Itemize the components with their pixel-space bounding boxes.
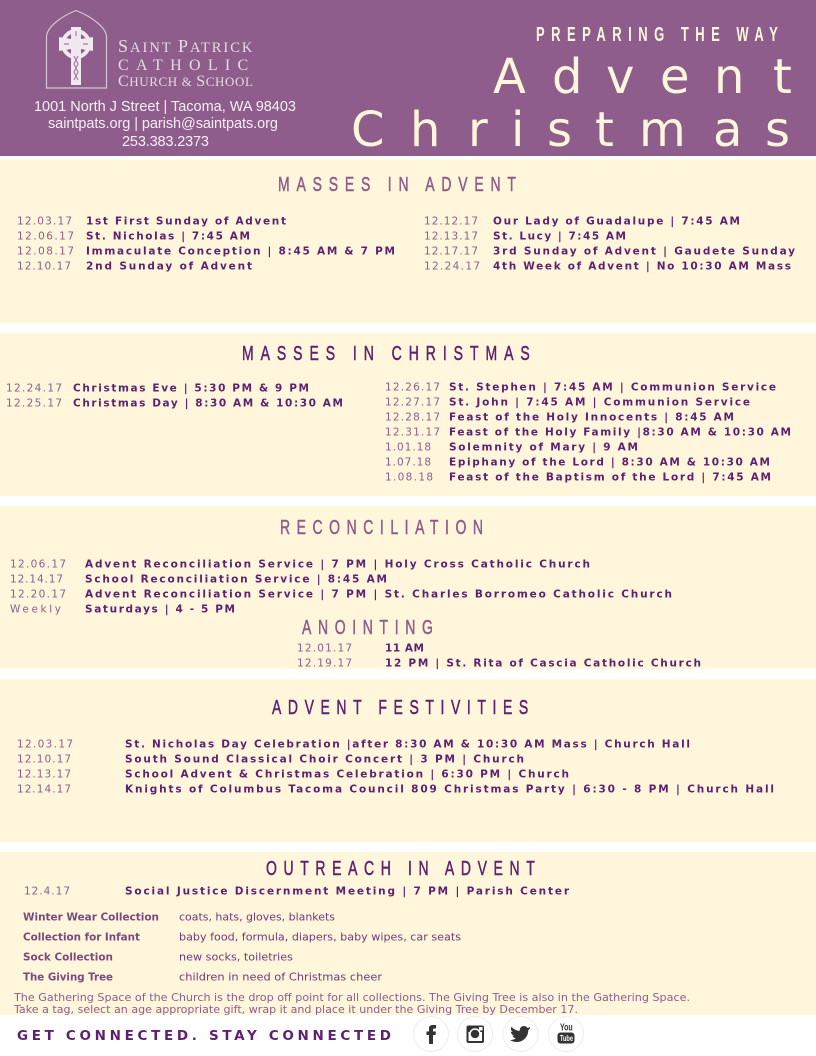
- anointing schedule: 12 PM | St. Rita of Cascia Catholic Church: [385, 657, 701, 669]
- schedule: right column: 12.28.17: [385, 411, 440, 423]
- festivities schedule: 12.14.17: [17, 783, 71, 795]
- icon: YouTube: [548, 1016, 584, 1052]
- panel: masses in Advent: [0, 160, 816, 323]
- title: Advent: Advent: [493, 49, 792, 105]
- schedule: right column: Feast of the Holy Family |8:30 AM & 10:30 AM: [449, 426, 791, 438]
- footer call to action: GET CONNECTED. STAY CONNECTED: [17, 1028, 391, 1044]
- schedule: right column: 12.24.17: [424, 260, 480, 272]
- logo wordmark: CHURCH & SCHOOL: [118, 73, 253, 90]
- schedule: left column: 1st First Sunday of Advent: [86, 215, 286, 227]
- schedule: right column: 1.01.18: [385, 441, 431, 453]
- schedule: right column: St. John | 7:45 AM | Communion Service: [449, 396, 750, 408]
- social icons: [414, 1016, 584, 1052]
- icon: Instagram: [458, 1016, 492, 1052]
- festivities schedule: Knights of Columbus Tacoma Council 809 Christmas Party | 6:30 - 8 PM | Church Hall: [125, 783, 774, 795]
- contact details: 1001 North J Street | Tacoma, WA 98403: [34, 99, 296, 115]
- collection list: baby food, formula, diapers, baby wipes, car seats: [179, 931, 461, 943]
- logo wordmark: SAINT PATRICK: [118, 36, 254, 56]
- heading: ADVENT FESTIVITIES: [272, 695, 528, 719]
- icon: Twitter: [503, 1016, 538, 1052]
- reconciliation schedule: [10, 558, 672, 615]
- schedule: right column: Epiphany of the Lord | 8:30 AM & 10:30 AM: [449, 456, 770, 468]
- collection list: Sock Collection: [23, 951, 113, 963]
- schedule: left column: Christmas Eve | 5:30 PM & 9 PM: [73, 382, 309, 394]
- schedule: left column: Christmas Day | 8:30 AM & 10:30 AM: [73, 397, 343, 409]
- schedule: left column: 2nd Sunday of Advent: [86, 260, 252, 272]
- schedule: right column: 12.26.17: [385, 381, 440, 393]
- heading: MASSES IN CHRISTMAS: [242, 341, 530, 365]
- festivities schedule: School Advent & Christmas Celebration | 6:30 PM | Church: [125, 768, 569, 780]
- schedule: right column: 1.08.18: [385, 471, 433, 483]
- schedule: right column: 12.13.17: [424, 230, 478, 242]
- schedule: left column: 12.03.17: [17, 215, 72, 227]
- anointing schedule: 12.19.17: [297, 657, 352, 669]
- heading: OUTREACH IN ADVENT: [266, 856, 535, 880]
- schedule: right column: 12.31.17: [385, 426, 440, 438]
- drop-off note: Take a tag, select an age appropriate gift, wrap it and place it under the Giving Tree by December 17.: [13, 1004, 578, 1016]
- schedule: left column: [17, 215, 395, 272]
- heading: MASSES IN ADVENT: [278, 172, 516, 196]
- icon: YouTube: Tube: [560, 1035, 573, 1043]
- schedule: left column: Immaculate Conception | 8:45 AM & 7 PM: [86, 245, 395, 257]
- collection list: new socks, toiletries: [179, 951, 293, 963]
- reconciliation schedule: School Reconciliation Service | 8:45 AM: [85, 573, 387, 585]
- schedule: right column: St. Stephen | 7:45 AM | Communion Service: [449, 381, 776, 393]
- reconciliation schedule: Saturdays | 4 - 5 PM: [85, 603, 235, 615]
- drop-off note: The Gathering Space of the Church is the drop off point for all collections. The Giving Tree is also in the Gathering Space.: [13, 992, 690, 1004]
- festivities schedule: 12.03.17: [17, 738, 73, 750]
- collection list: Collection for Infant: [23, 931, 140, 943]
- collection list: [23, 911, 461, 983]
- discernment meeting: 12.4.17: [24, 885, 70, 897]
- contact details: 253.383.2373: [122, 134, 209, 150]
- panel: reconciliation and anointing: [0, 506, 816, 669]
- festivities schedule: 12.10.17: [17, 753, 71, 765]
- logo: church arch and Celtic cross: [46, 10, 106, 88]
- logo wordmark: [118, 36, 256, 90]
- schedule: right column: 1.07.18: [385, 456, 431, 468]
- schedule: right column: [385, 381, 791, 483]
- reconciliation schedule: Advent Reconciliation Service | 7 PM | St. Charles Borromeo Catholic Church: [85, 588, 672, 600]
- schedule: right column: 12.17.17: [424, 245, 478, 257]
- anointing schedule: 12.01.17: [297, 642, 352, 654]
- logo wordmark: CATHOLIC: [118, 57, 256, 74]
- festivities schedule: 12.13.17: [17, 768, 71, 780]
- discernment meeting: Social Justice Discernment Meeting | 7 PM | Parish Center: [125, 885, 570, 897]
- schedule: right column: Feast of the Baptism of the Lord | 7:45 AM: [449, 471, 771, 483]
- heading: reconciliation: RECONCILIATION: [280, 515, 483, 539]
- schedule: right column: Feast of the Holy Innocents | 8:45 AM: [449, 411, 734, 423]
- schedule: right column: 3rd Sunday of Advent | Gaudete Sunday: [493, 245, 795, 257]
- anointing schedule: [297, 642, 701, 669]
- festivities schedule: [17, 738, 774, 795]
- icon: Facebook: [414, 1016, 448, 1052]
- contact details: [34, 99, 296, 150]
- drop-off note: [13, 992, 690, 1016]
- anointing schedule: 11 AM: [385, 642, 424, 654]
- schedule: right column: 12.12.17: [424, 215, 478, 227]
- panel: outreach in Advent: [0, 852, 816, 1016]
- schedule: left column: 12.24.17: [6, 382, 62, 394]
- panel: Advent festivities: [0, 679, 816, 842]
- schedule: left column: 12.08.17: [17, 245, 74, 257]
- header banner: [0, 0, 816, 158]
- collection list: The Giving Tree: [23, 971, 113, 983]
- collection list: children in need of Christmas cheer: [179, 971, 383, 983]
- schedule: left column: 12.25.17: [6, 397, 62, 409]
- schedule: right column: 4th Week of Advent | No 10:30 AM Mass: [493, 260, 791, 272]
- schedule: right column: [424, 215, 795, 272]
- title: Christmas: Christmas: [351, 102, 790, 158]
- festivities schedule: South Sound Classical Choir Concert | 3 PM | Church: [125, 753, 524, 765]
- schedule: right column: Solemnity of Mary | 9 AM: [449, 441, 638, 453]
- collection list: coats, hats, gloves, blankets: [179, 911, 335, 923]
- icon: YouTube: You: [560, 1021, 573, 1033]
- schedule: left column: [6, 382, 343, 409]
- panel: masses in Christmas: [0, 333, 816, 496]
- schedule: left column: 12.10.17: [17, 260, 71, 272]
- schedule: left column: St. Nicholas | 7:45 AM: [86, 230, 250, 242]
- collection list: Winter Wear Collection: [23, 911, 159, 923]
- reconciliation schedule: 12.14.17: [10, 573, 63, 585]
- tagline: PREPARING THE WAY: [536, 23, 778, 46]
- reconciliation schedule: Advent Reconciliation Service | 7 PM | Holy Cross Catholic Church: [85, 558, 590, 570]
- reconciliation schedule: 12.20.17: [10, 588, 66, 600]
- contact details: saintpats.org | parish@saintpats.org: [48, 116, 278, 132]
- schedule: right column: 12.27.17: [385, 396, 440, 408]
- schedule: left column: 12.06.17: [17, 230, 74, 242]
- reconciliation schedule: 12.06.17: [10, 558, 66, 570]
- reconciliation schedule: Weekly: [10, 603, 61, 615]
- schedule: right column: St. Lucy | 7:45 AM: [493, 230, 626, 242]
- heading: anointing: ANOINTING: [302, 615, 433, 639]
- festivities schedule: St. Nicholas Day Celebration |after 8:30 AM & 10:30 AM Mass | Church Hall: [125, 738, 690, 750]
- schedule: right column: Our Lady of Guadalupe | 7:45 AM: [493, 215, 740, 227]
